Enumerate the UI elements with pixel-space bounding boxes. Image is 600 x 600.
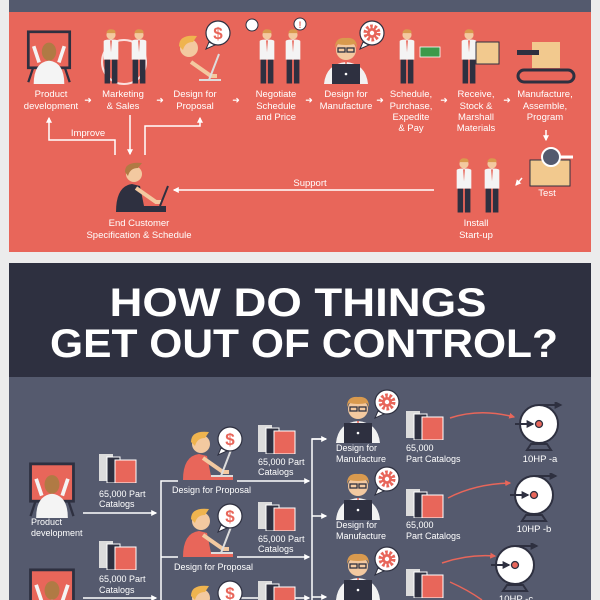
icon: product development presenter [28, 32, 70, 84]
text: test: Test [538, 188, 556, 199]
text: design for manufacture: Design for [336, 520, 377, 530]
icon: books column 1 [99, 454, 136, 570]
icon: design for proposal people [183, 427, 242, 600]
text: motor labels: 10HP -b [517, 524, 551, 535]
step labels: Receive, [458, 89, 494, 100]
text: design for proposal: Design for Proposal [174, 562, 253, 572]
flow lines [83, 439, 326, 600]
step arrows: ➜ [503, 95, 511, 105]
panel: out of control flow [9, 377, 591, 600]
step arrows [84, 95, 511, 105]
step arrows: ➜ [376, 95, 384, 105]
arrow: improve loop [49, 115, 546, 190]
step labels: Product [35, 89, 68, 100]
step labels: Purchase, [390, 101, 432, 112]
step arrows: ➜ [232, 95, 240, 105]
text: improve / support [71, 128, 327, 189]
step arrows: ➜ [84, 95, 92, 105]
text: design for manufacture: Manufacture [336, 531, 386, 541]
icon: design for proposal [171, 21, 230, 84]
text: catalogs column 2: 65,000 Part [258, 457, 305, 467]
icon: motors [491, 405, 561, 591]
icon: test box [530, 148, 573, 186]
icon: end customer [116, 163, 168, 212]
text: end customer: Specification & Schedule [86, 230, 192, 241]
icon: schedule purchase [400, 29, 440, 84]
text: design for proposal [172, 485, 253, 572]
text: product development: development [31, 528, 83, 538]
text: install: Install [464, 218, 488, 229]
icon: manufacture machine [517, 42, 574, 82]
text: catalogs column 1: 65,000 Part [99, 574, 146, 584]
text: improve / support: Support [293, 178, 327, 189]
step labels: Manufacture [320, 101, 372, 112]
text: catalogs column 1 [99, 489, 146, 595]
text: catalogs column 1: Catalogs [99, 499, 135, 509]
icon: negotiate: ! [298, 20, 302, 30]
text: catalogs column 2 [258, 457, 305, 554]
step labels: & Pay [398, 123, 424, 134]
text: catalogs column 3: 65,000 [406, 443, 434, 453]
text: end customer: End Customer [109, 218, 169, 229]
text: design for manufacture: Manufacture [336, 454, 386, 464]
red arrows [442, 413, 514, 600]
text: catalogs column 1: 65,000 Part [99, 489, 146, 499]
step labels: Manufacture, [517, 89, 573, 100]
step labels: Design for [173, 89, 217, 100]
step labels: Marshall [458, 112, 494, 123]
step arrows: ➜ [156, 95, 164, 105]
icon: design for manufacture people [336, 390, 399, 600]
text: install [459, 218, 493, 241]
text: catalogs column 1: Catalogs [99, 585, 135, 595]
text: design for manufacture: Design for [336, 443, 377, 453]
text: catalogs column 3: Part Catalogs [406, 454, 461, 464]
text: design for manufacture [336, 443, 386, 541]
icon: books column 2 [258, 425, 295, 600]
title band [9, 263, 591, 377]
step labels: Negotiate [256, 89, 296, 100]
icon: install handshake [457, 158, 499, 212]
step labels: Proposal [176, 101, 214, 112]
text: design for proposal: Design for Proposal [172, 485, 251, 495]
title band: HOW DO THINGS [110, 281, 486, 325]
panel: top process [9, 0, 591, 252]
step arrows: ➜ [305, 95, 313, 105]
icon: books column 3 [406, 411, 443, 598]
text: improve / support: Improve [71, 128, 105, 139]
step labels: Design for [324, 89, 368, 100]
text: catalogs column 2: 65,000 Part [258, 534, 305, 544]
step labels: Assemble, [523, 101, 567, 112]
step labels: development [24, 101, 79, 112]
step labels: Program [527, 112, 563, 123]
text: motor labels: 10HP -a [523, 454, 558, 465]
text: catalogs column 3: Part Catalogs [406, 531, 461, 541]
title band: GET OUT OF CONTROL? [50, 322, 558, 366]
step labels: Schedule [256, 101, 296, 112]
icon: receive stock [462, 29, 499, 84]
step labels: Materials [457, 123, 496, 134]
step labels: and Price [256, 112, 296, 123]
step labels: & Sales [107, 101, 140, 112]
icon: product development presenters [31, 464, 73, 600]
step arrows: ➜ [440, 95, 448, 105]
text: catalogs column 2: Catalogs [258, 467, 294, 477]
text: product development: Product [31, 517, 63, 527]
step labels: Marketing [102, 89, 144, 100]
step labels: Expedite [393, 112, 429, 123]
text: catalogs column 3 [406, 443, 461, 541]
text: motor labels [499, 454, 558, 600]
text: end customer [86, 218, 192, 241]
text: product development [31, 517, 83, 538]
step labels [24, 89, 573, 134]
icon: design for manufacture [324, 21, 384, 84]
icon: negotiate [246, 18, 306, 84]
step labels: Stock & [460, 101, 493, 112]
step labels: Schedule, [390, 89, 432, 100]
text: install: Start-up [459, 230, 493, 241]
icon: marketing & sales [102, 29, 146, 84]
text: catalogs column 2: Catalogs [258, 544, 294, 554]
text: catalogs column 3: 65,000 [406, 520, 434, 530]
